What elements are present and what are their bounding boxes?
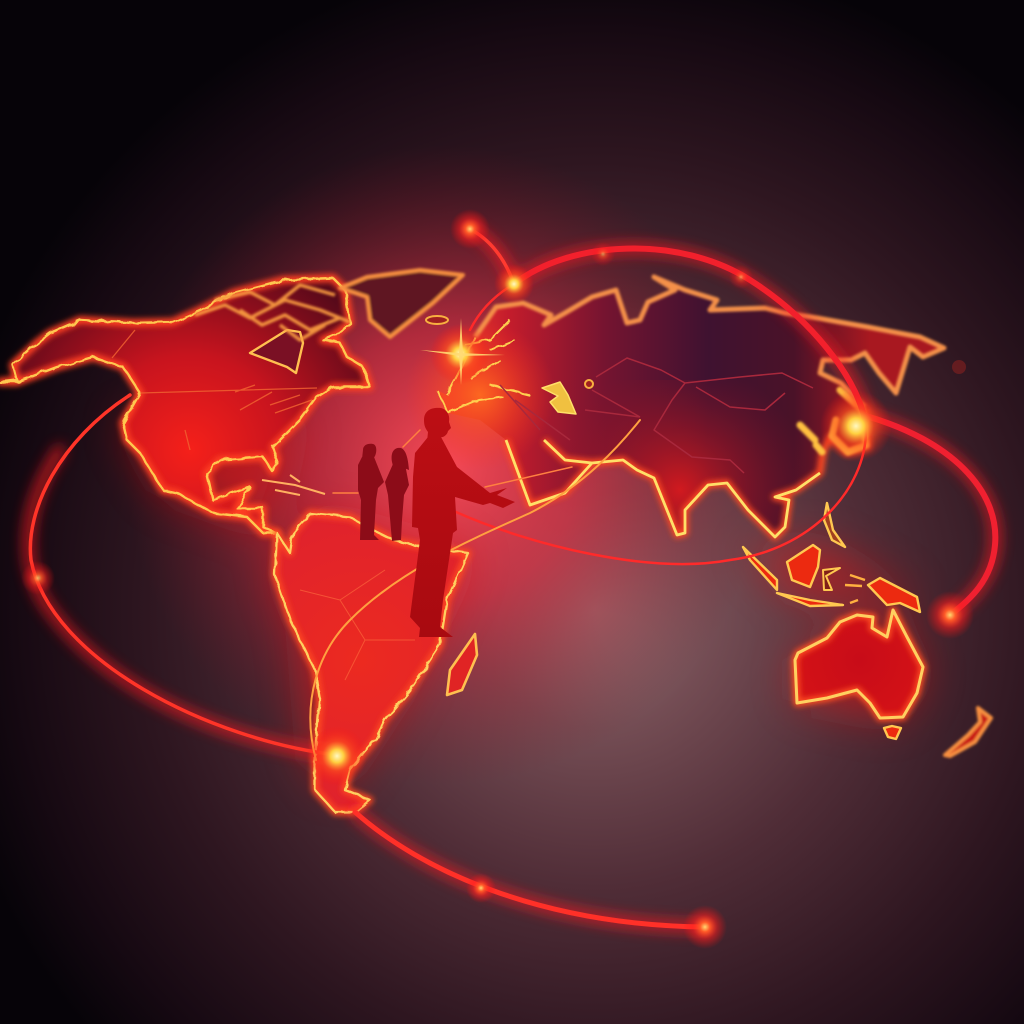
arc: Pacific west (30, 395, 337, 755)
network nodes (21, 209, 974, 949)
Japan and Korea glow (800, 390, 866, 452)
continent: South America (275, 513, 468, 812)
islands: Caribbean (262, 475, 325, 495)
northern coast, out of focus (475, 277, 944, 407)
network arcs (29, 229, 995, 927)
figure: large man gesturing (410, 408, 515, 637)
arc: Eurasia loop (456, 249, 866, 564)
world map (0, 270, 991, 812)
island: New Zealand (945, 708, 991, 756)
Hudson Bay (250, 330, 303, 373)
arc: thin Arabian (333, 430, 572, 493)
figure: woman in pair (385, 448, 409, 541)
continent: North America (0, 278, 370, 533)
figure: man in pair (358, 444, 384, 540)
arc: thin Atlantic (310, 420, 640, 760)
islands: Indonesia and Pacific (743, 503, 920, 739)
continent: Australia (795, 610, 923, 718)
arc glow (29, 229, 995, 927)
Arctic islands (195, 285, 350, 340)
arc: top spur (470, 229, 514, 284)
continent glow (120, 420, 925, 790)
Europe coast (437, 320, 530, 413)
internal borders (500, 358, 813, 473)
arc: Pacific east (866, 416, 995, 615)
island: Iceland (426, 316, 448, 324)
continent: Greenland (340, 270, 463, 337)
arc: South Atlantic (355, 812, 705, 927)
southern coast (506, 407, 868, 537)
Europe glow (405, 320, 555, 470)
Aral Sea (585, 380, 593, 388)
island: Madagascar (447, 634, 477, 695)
continent: Eurasia (405, 277, 944, 560)
people silhouettes (358, 408, 515, 637)
Caspian Sea (542, 382, 576, 414)
borders and lakes (112, 330, 317, 450)
